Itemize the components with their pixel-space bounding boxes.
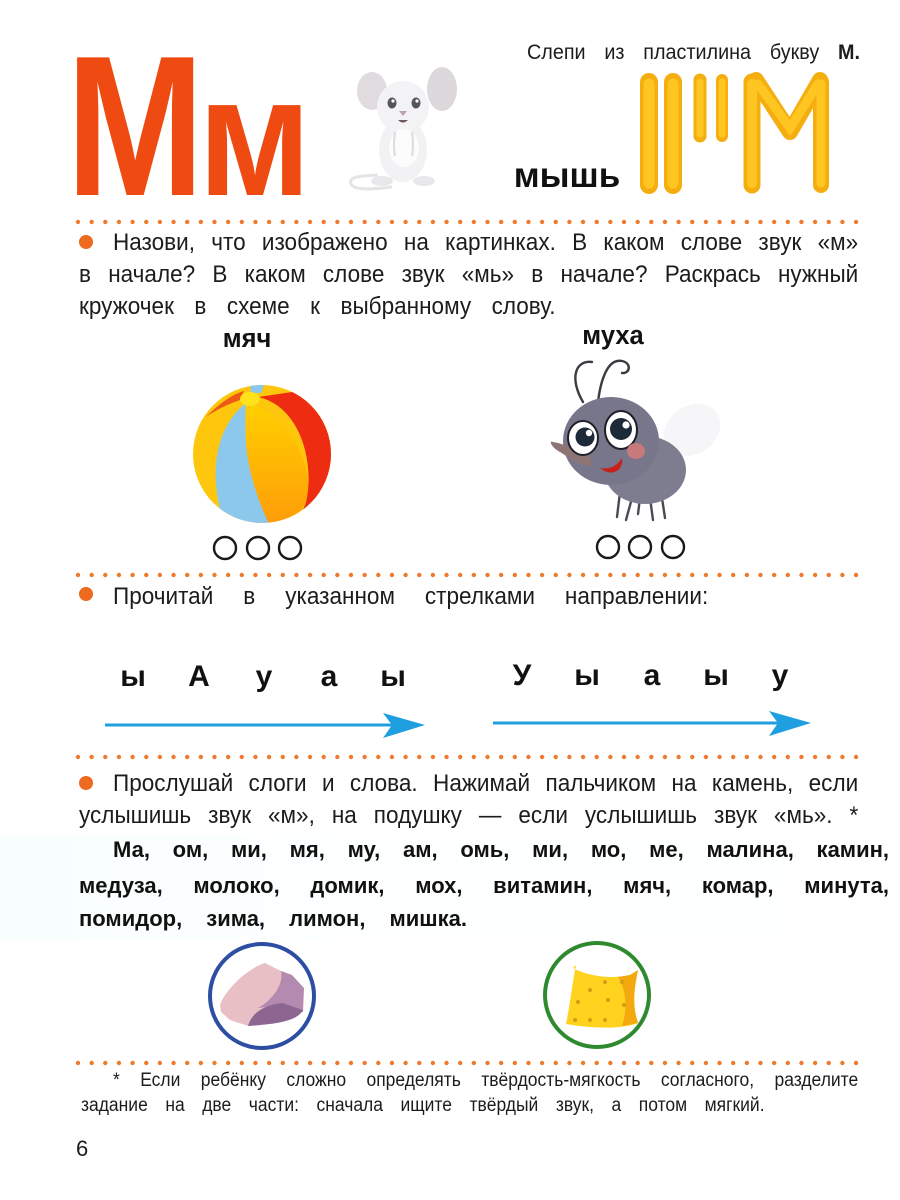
instruction: sculpt letter: Слепи из пластилина букву М. (527, 40, 860, 64)
icon: beach ball (193, 385, 331, 523)
arrow 2 (493, 711, 811, 736)
reading letters row 1: ы (380, 660, 406, 693)
icon: fly (550, 360, 720, 522)
task 1 text: кружочек в схеме к выбранному слову. (79, 293, 556, 320)
icon: mouse (349, 67, 457, 190)
reading letters row 2: у (772, 659, 788, 692)
label: муха: муха (582, 322, 644, 350)
icon: plasticine bars forming letter M (640, 72, 829, 194)
task 1 text: в начале? В каком слове звук «мь» в начале? Раскрась нужный (79, 261, 858, 288)
bold syllables and words (79, 837, 889, 931)
arrow 1 (105, 713, 425, 738)
icon: stone in blue circle (208, 942, 316, 1050)
bold syllables and words: медуза, молоко, домик, мох, витамин, мяч, комар, минута, (79, 873, 889, 898)
task 1 text (79, 229, 858, 320)
reading letters row 1 (120, 660, 406, 693)
bold syllables and words: Ма, ом, ми, мя, му, ам, омь, ми, мо, ме, малина, камин, (113, 837, 889, 862)
task 2 text: Прочитай в указанном стрелками направлении: (113, 583, 708, 610)
task 3 text (79, 770, 858, 829)
word: мышь: мышь (514, 156, 620, 195)
footnote: задание на две части: сначала ищите твёрдый звук, а потом мягкий. (81, 1095, 765, 1116)
label: мяч: мяч (223, 325, 271, 353)
background wash behind bold words (0, 835, 900, 940)
task 3 text: Прослушай слоги и слова. Нажимай пальчиком на камень, если (113, 770, 858, 797)
bold syllables and words: помидор, зима, лимон, мишка. (79, 906, 467, 931)
reading letters row 2: ы (574, 659, 600, 692)
reading letters row 2: а (644, 659, 660, 692)
reading letters row 1: а (321, 660, 337, 693)
task 1 text: Назови, что изображено на картинках. В каком слове звук «м» (113, 229, 858, 256)
answer circles: мяч (212, 536, 302, 560)
reading letters row 2: ы (703, 659, 729, 692)
title letters Mm: м (198, 43, 311, 232)
footnote (81, 1070, 858, 1116)
answer circles: муха (596, 534, 686, 560)
reading letters row 1: у (256, 660, 272, 693)
reading letters row 1: А (188, 660, 210, 693)
icon: pillow in green circle (543, 941, 651, 1049)
footnote: * Если ребёнку сложно определять твёрдость-мягкость согласного, разделите (113, 1070, 858, 1091)
page number: 6 (76, 1136, 88, 1161)
reading letters row 2: У (513, 659, 531, 692)
reading letters row 2 (512, 659, 788, 692)
title letters Mm (66, 30, 311, 237)
task 3 text: услышишь звук «м», на подушку — если услышишь звук «мь». * (79, 802, 858, 829)
reading letters row 1: ы (120, 660, 146, 693)
